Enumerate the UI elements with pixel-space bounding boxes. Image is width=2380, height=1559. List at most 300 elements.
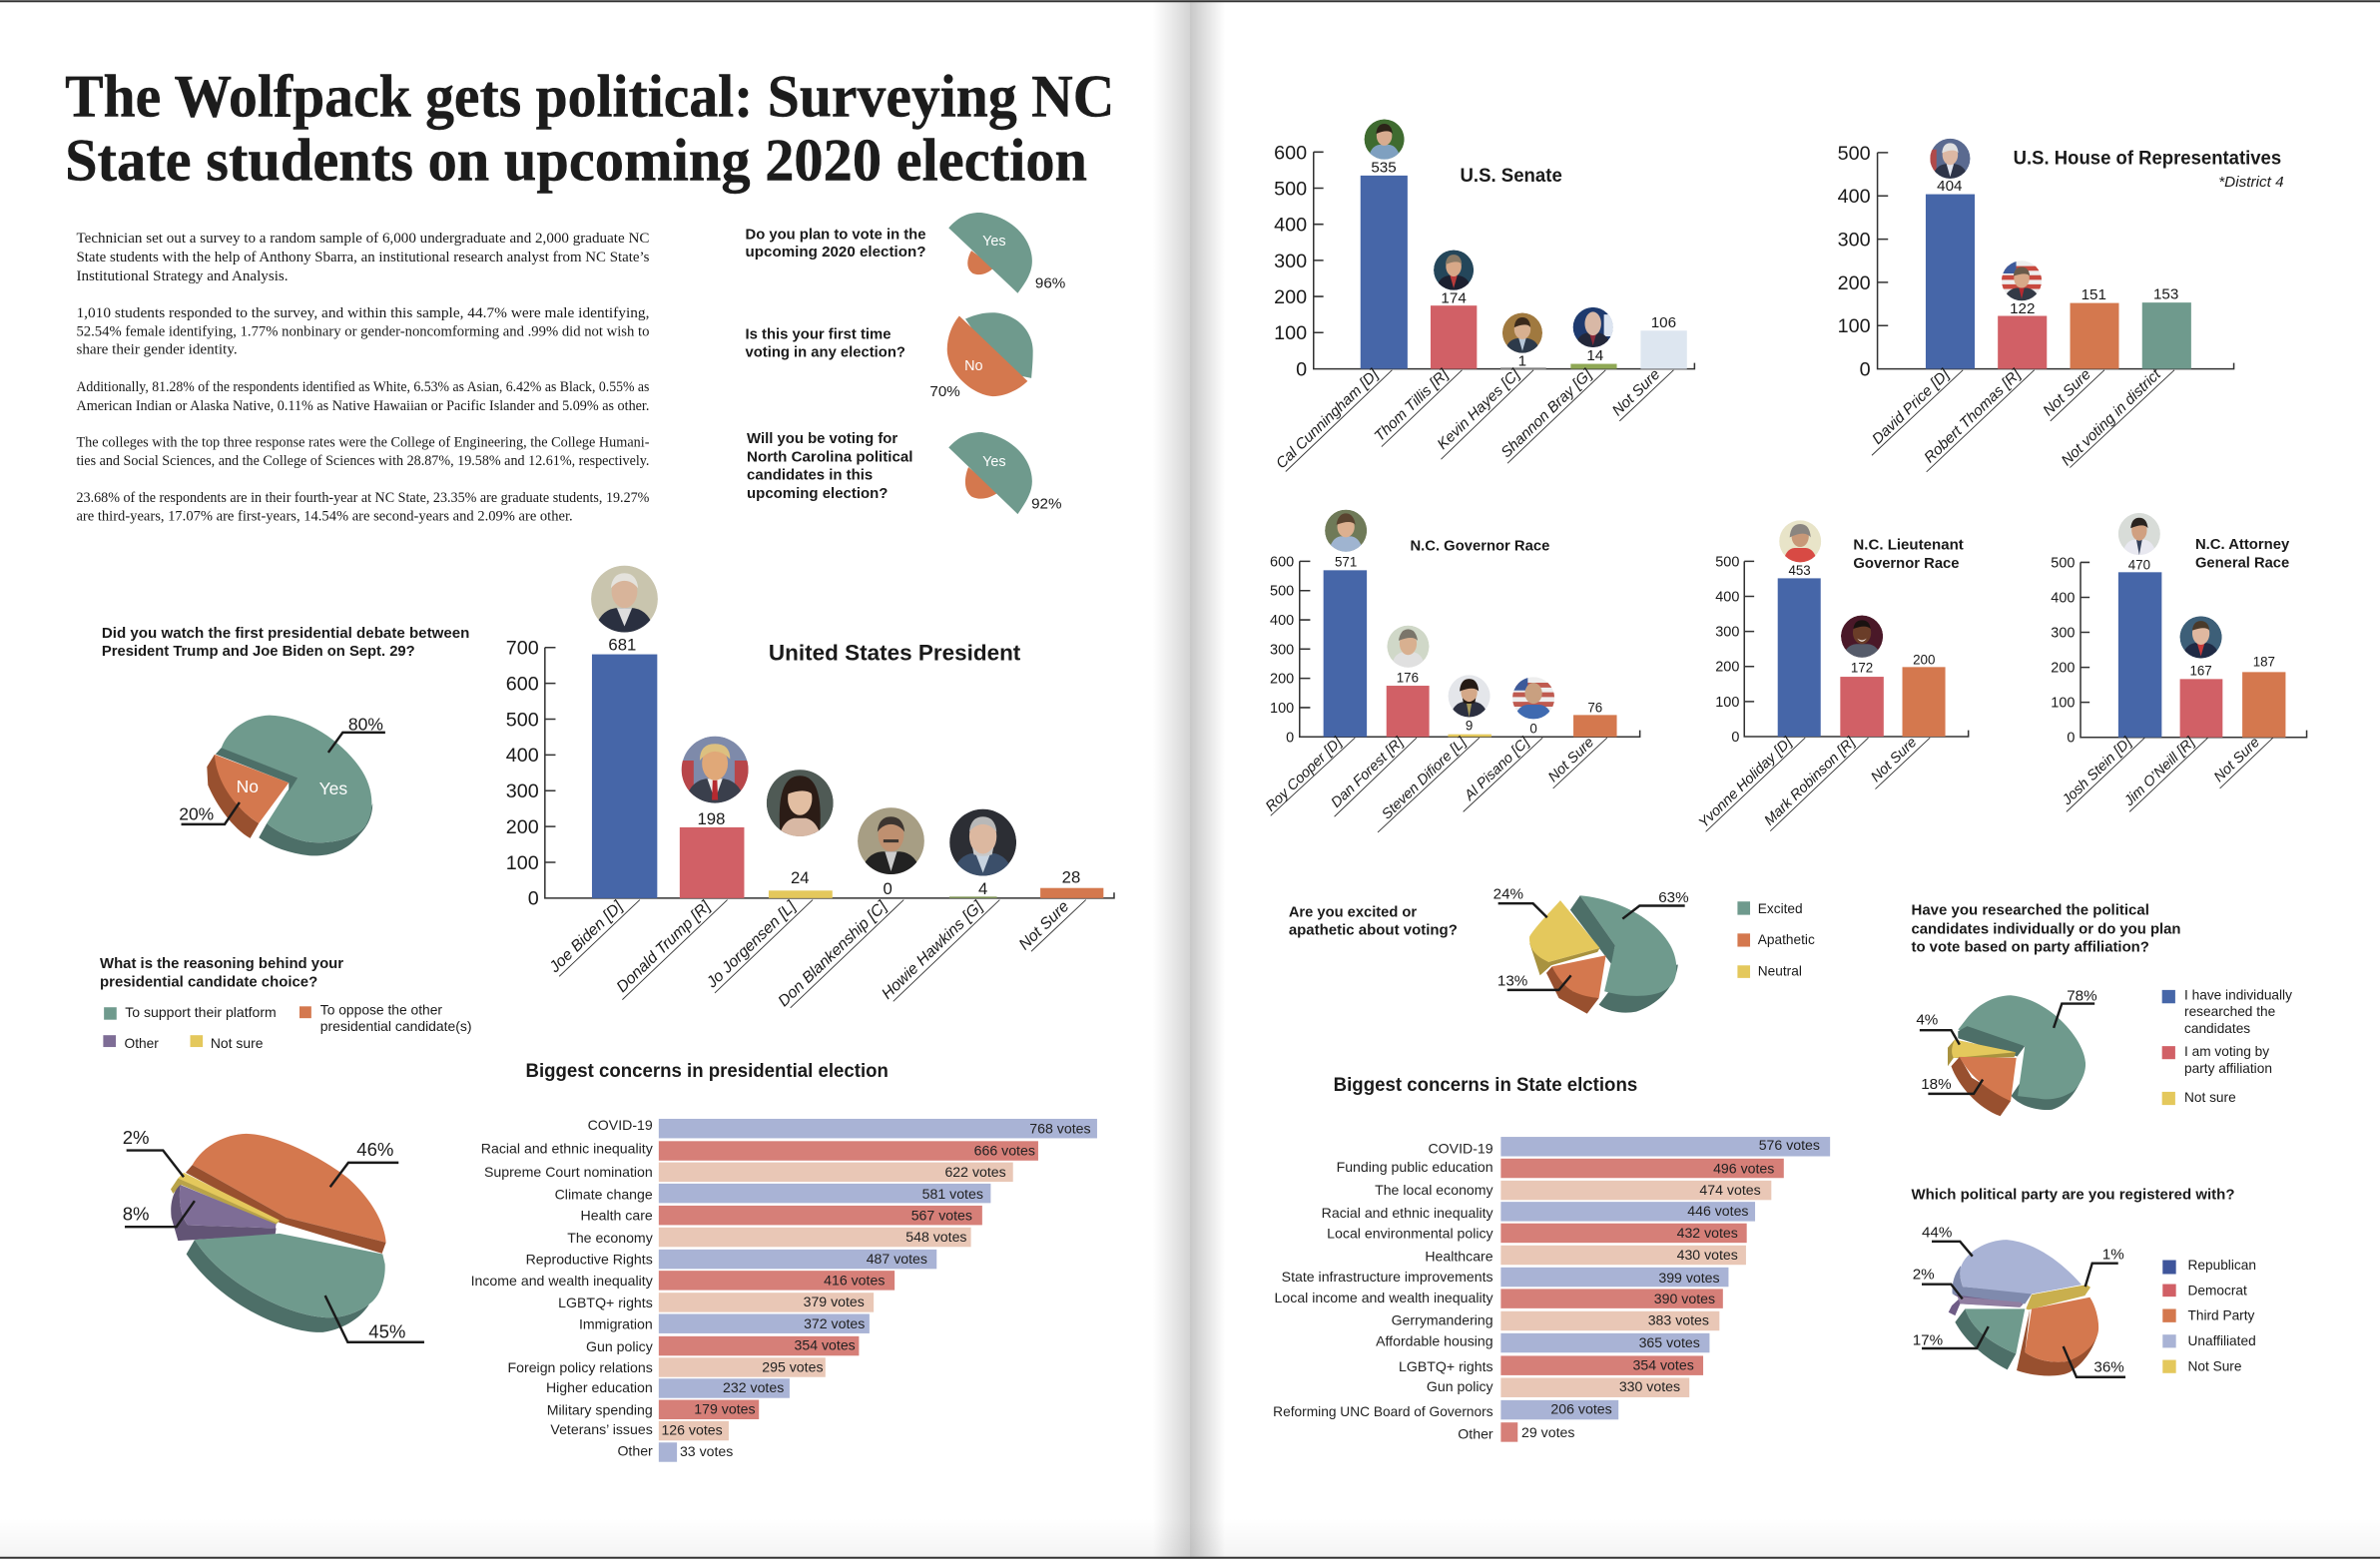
question: Have you researched the political (1911, 902, 2149, 919)
y axis: 500 (1270, 584, 1294, 600)
heading: Biggest concerns in State elctions (1334, 1075, 1637, 1096)
value labels: 198 (698, 809, 725, 828)
panel: party registration (1911, 1187, 2256, 1377)
legend: Other (125, 1036, 159, 1051)
vote values: 383 votes (1648, 1311, 1709, 1327)
y axis: 400 (2051, 591, 2075, 607)
vote values: 232 votes (723, 1379, 784, 1395)
y axis: 100 (1715, 695, 1739, 711)
y axis (2051, 555, 2307, 747)
intro text block: share their gender identity. (76, 342, 238, 358)
3D pie: candidate reasoning: 2% (123, 1127, 149, 1148)
intro text block: The colleges with the top three response rates were the College of Engineering, the College Humani- (76, 434, 650, 450)
legend: I am voting by (2184, 1044, 2269, 1059)
chart title: U.S. House of Representatives (2014, 148, 2281, 169)
pie: 96% (1035, 275, 1065, 292)
vote values: 496 votes (1713, 1161, 1774, 1177)
category labels: Affordable housing (1376, 1332, 1493, 1348)
category labels: Not Sure (1545, 735, 1597, 785)
category labels: COVID-19 (588, 1117, 653, 1133)
pie: No (964, 358, 983, 374)
y axis (1274, 142, 1694, 380)
panel: researched candidates (1911, 902, 2292, 1116)
photo: Thom Tillis (1434, 251, 1474, 291)
chart title: N.C. Governor Race (1410, 538, 1549, 555)
value labels (1335, 554, 1602, 736)
vote values: 430 votes (1677, 1247, 1738, 1263)
category labels: The economy (567, 1230, 654, 1246)
3D pie: Yes (319, 779, 347, 798)
category labels (1273, 1140, 1494, 1441)
category labels (546, 897, 1086, 1010)
category labels: Thom Tillis [R] (1371, 365, 1453, 445)
y axis: 0 (1286, 730, 1294, 746)
category labels: Reforming UNC Board of Governors (1273, 1403, 1493, 1419)
category labels (1273, 365, 1673, 472)
y axis: 400 (1715, 590, 1739, 606)
category labels: Not Sure (1016, 898, 1073, 953)
y axis: 500 (1274, 178, 1307, 200)
panel: U.S. House chart (1838, 139, 2284, 472)
category labels (1696, 734, 1930, 831)
3D pie (1493, 885, 1689, 1014)
category labels (2059, 734, 2273, 811)
category labels: Josh Stein [D] (2059, 734, 2135, 809)
legend: Not sure (211, 1036, 263, 1051)
value labels: 681 (608, 636, 636, 655)
panel: debate question (102, 625, 469, 855)
vote values: 330 votes (1619, 1378, 1680, 1394)
pie: 70% (929, 383, 960, 400)
vote values: 666 votes (974, 1142, 1035, 1158)
question: Will you be voting for (747, 430, 897, 447)
3D pie: 44% (1922, 1225, 1952, 1242)
category labels: Foreign policy relations (508, 1359, 653, 1375)
y axis: 500 (1838, 143, 1871, 165)
y axis: 600 (1274, 142, 1307, 164)
value labels: 0 (883, 879, 892, 898)
legend (1737, 901, 1815, 978)
value labels (2128, 557, 2275, 679)
category labels: Local income and wealth inequality (1275, 1290, 1494, 1305)
category labels: Military spending (547, 1401, 653, 1417)
intro text block: American Indian or Alaska Native, 0.11% as Native Hawaiian or Pacific Islander and 5.09% as other. (76, 398, 649, 414)
legend: Third Party (2188, 1308, 2255, 1323)
category labels: Robert Thomas [R] (1921, 365, 2025, 466)
vote values: 416 votes (824, 1272, 885, 1288)
y axis: 100 (506, 852, 539, 874)
category labels: Not voting in district (2059, 365, 2164, 469)
3D pie: candidate reasoning: 45% (368, 1321, 405, 1342)
category labels: Climate change (555, 1187, 653, 1203)
value labels (608, 636, 1080, 898)
legend: party affiliation (2184, 1061, 2272, 1076)
3D pie: 4% (1916, 1012, 1938, 1029)
category labels: Healthcare (1425, 1249, 1493, 1265)
value labels: 106 (1651, 314, 1676, 331)
pie (948, 213, 1065, 293)
intro text block: State students with the help of Anthony Sbarra, an institutional research analyst from NC State’s (76, 250, 650, 265)
question: upcoming election? (747, 485, 888, 502)
chart title: U.S. Senate (1460, 166, 1562, 187)
photo: Yvonne Holiday (1779, 520, 1821, 564)
category labels: Other (617, 1442, 653, 1458)
intro text block: ties and Social Sciences, and the College of Sciences with 28.87%, 19.58% and 12.61%, respectively. (76, 453, 649, 469)
y axis: 500 (1715, 554, 1739, 570)
vote values: 354 votes (1633, 1356, 1694, 1372)
value labels: 76 (1587, 700, 1602, 715)
legend: Excited (1758, 901, 1803, 916)
value labels: 187 (2253, 654, 2275, 669)
category labels: Don Blankenship [C] (776, 897, 891, 1010)
panel: United States President chart (506, 566, 1114, 1010)
y axis: 200 (1274, 286, 1307, 308)
vote values (1521, 1137, 1820, 1440)
y axis (1838, 143, 2234, 381)
vote values: 576 votes (1759, 1137, 1820, 1153)
3D pie: 36% (2093, 1359, 2124, 1376)
category labels: Cal Cunningham [D] (1273, 365, 1383, 472)
y axis: 100 (2051, 696, 2075, 712)
vote values: 548 votes (905, 1229, 966, 1245)
category labels: Not Sure (1868, 735, 1920, 785)
value labels: 153 (2153, 285, 2178, 302)
question: candidates in this (747, 467, 873, 484)
legend (2162, 988, 2292, 1105)
y axis: 300 (1715, 625, 1739, 641)
value labels: 151 (2082, 286, 2106, 303)
bars (1361, 176, 1687, 369)
photo: Kevin Hayes (1502, 312, 1542, 354)
y axis: 200 (1838, 272, 1871, 294)
photo: Josh Stein (2118, 513, 2160, 557)
vote values: 581 votes (922, 1186, 983, 1202)
title (65, 62, 1114, 194)
y axis: 300 (1838, 230, 1871, 252)
photo: Dan Forest (1387, 626, 1430, 670)
photo: Jim O'Neill (2180, 616, 2222, 660)
question: Which political party are you registered with? (1911, 1187, 2234, 1204)
legend: To oppose the other (320, 1003, 442, 1018)
vote values: 446 votes (1687, 1203, 1749, 1219)
category labels: Supreme Court nomination (484, 1164, 653, 1180)
question: Is this your first time (746, 325, 891, 342)
value labels: 172 (1851, 660, 1873, 675)
y axis: 0 (1296, 358, 1307, 380)
heading: Biggest concerns in presidential election (526, 1061, 889, 1082)
value labels: 571 (1335, 554, 1357, 569)
vote values: 33 votes (680, 1443, 733, 1459)
category labels: Mark Robinson [R] (1762, 734, 1859, 828)
value labels: 535 (1371, 160, 1397, 177)
y axis: 100 (1838, 315, 1871, 337)
category labels: State infrastructure improvements (1282, 1269, 1493, 1285)
pie: 92% (1031, 496, 1062, 513)
category labels: Howie Hawkins [G] (879, 897, 986, 1003)
vote values: 206 votes (1550, 1400, 1612, 1416)
y axis (506, 638, 1114, 910)
legend: candidates (2184, 1021, 2250, 1036)
photo: Steven Difiore (1449, 675, 1490, 719)
intro text block: Institutional Strategy and Analysis. (76, 268, 289, 284)
question: candidates individually or do you plan (1911, 920, 2181, 937)
intro text block: 52.54% female identifying, 1.77% nonbinary or gender-noncomforming and .99% did not wish to (76, 323, 649, 339)
panel: N.C. Attorney General chart (2051, 513, 2307, 811)
y axis: 200 (2051, 661, 2075, 677)
legend (103, 1003, 472, 1051)
chart title: General Race (2195, 554, 2289, 571)
panel: biggest concerns state (1273, 1075, 1830, 1442)
chart title (1853, 537, 1964, 572)
panel: biggest concerns presidential (471, 1061, 1097, 1462)
3D pie: 78% (2067, 988, 2097, 1005)
category labels: COVID-19 (1428, 1140, 1493, 1156)
photo: Cal Cunningham (1365, 119, 1405, 161)
y axis: 100 (1270, 701, 1294, 717)
vote values: 768 votes (1029, 1121, 1091, 1137)
photo: Don Blankenship (858, 807, 924, 877)
category labels: Racial and ethnic inequality (481, 1141, 654, 1157)
3D pie: No (237, 777, 259, 796)
chart title: N.C. Attorney (2195, 536, 2290, 553)
pie (948, 432, 1062, 514)
question: Do you plan to vote in the (746, 226, 925, 243)
3D pie: 80% (348, 715, 383, 735)
y axis: 0 (528, 888, 539, 910)
value labels: 176 (1397, 670, 1419, 685)
pie: Yes (982, 234, 1006, 250)
legend: presidential candidate(s) (320, 1019, 472, 1034)
value labels: 122 (2010, 300, 2035, 317)
3D pie (179, 715, 385, 855)
question: presidential candidate choice? (100, 974, 317, 991)
value labels: 28 (1062, 867, 1080, 886)
y axis (1715, 554, 1969, 746)
category labels: Steven Difiore [L] (1379, 734, 1471, 822)
photo: Jo Jorgensen (767, 770, 834, 839)
category labels (471, 1117, 654, 1458)
chart title: Governor Race (1853, 555, 1960, 572)
y axis: 500 (506, 709, 539, 731)
panel: first time voting (746, 312, 1033, 400)
3D pie: 17% (1913, 1331, 1943, 1348)
y axis: 300 (506, 780, 539, 802)
vote values (661, 1121, 1091, 1459)
category labels: Gun policy (1427, 1378, 1494, 1394)
3D pie: 24% (1493, 885, 1523, 902)
category labels: Gerrymandering (1392, 1311, 1493, 1327)
category labels: Not Sure (1609, 366, 1663, 419)
vote values: 567 votes (911, 1208, 972, 1224)
category labels: Higher education (546, 1379, 653, 1395)
question: Did you watch the first presidential debate between (102, 625, 469, 642)
chart title: N.C. Lieutenant (1853, 537, 1964, 554)
3D pie (1916, 988, 2097, 1116)
bars (2118, 572, 2285, 738)
title: The Wolfpack gets political: Surveying NC (65, 62, 1114, 129)
y axis: 300 (1270, 642, 1294, 658)
3D pie: candidate reasoning: 8% (123, 1204, 149, 1225)
question: President Trump and Joe Biden on Sept. 29? (102, 643, 415, 660)
question: to vote based on party affiliation? (1911, 938, 2149, 955)
y axis: 700 (506, 638, 539, 660)
y axis: 400 (1274, 215, 1307, 237)
category labels: Al Pisano [C] (1461, 734, 1533, 804)
vote values: 354 votes (794, 1337, 856, 1353)
title: State students on upcoming 2020 election (65, 127, 1087, 194)
3D pie: 18% (1921, 1076, 1952, 1093)
bars (659, 1119, 1097, 1462)
question: upcoming 2020 election? (746, 244, 925, 260)
3D pie: 13% (1497, 973, 1527, 990)
category labels: David Price [D] (1869, 365, 1954, 448)
category labels: Racial and ethnic inequality (1322, 1205, 1494, 1221)
photo: Al Pisano (1512, 677, 1554, 721)
value labels: 0 (1529, 721, 1537, 736)
3D pie: candidate reasoning (123, 1127, 424, 1342)
y axis: 600 (1270, 554, 1294, 570)
category labels: Jim O’Neill [R] (2120, 734, 2199, 810)
category labels: Roy Cooper [D] (1263, 734, 1346, 815)
intro text block: 23.68% of the respondents are in their fourth-year at NC State, 23.35% are graduate students, 19.27% (76, 490, 649, 506)
category labels (1869, 365, 2174, 472)
category labels: LGBTQ+ rights (558, 1295, 653, 1310)
question: voting in any election? (746, 344, 905, 361)
legend: Neutral (1758, 963, 1802, 978)
legend (2162, 1258, 2256, 1374)
legend: Not Sure (2188, 1359, 2241, 1374)
y axis: 400 (506, 745, 539, 767)
category labels: Local environmental policy (1327, 1225, 1494, 1241)
y axis: 300 (1274, 251, 1307, 272)
pie: Yes (982, 454, 1006, 470)
y axis: 400 (1270, 613, 1294, 629)
category labels: Shannon Bray [G] (1497, 365, 1596, 461)
y axis: 200 (1270, 672, 1294, 688)
y axis: 300 (2051, 626, 2075, 642)
category labels: Funding public education (1337, 1159, 1493, 1175)
question (747, 430, 913, 502)
intro text block: are third-years, 17.07% are first-years, 14.54% are second-years and 2.09% are other. (76, 508, 573, 524)
category labels: Reproductive Rights (526, 1252, 653, 1268)
legend: researched the (2184, 1004, 2275, 1019)
chart title (2195, 536, 2290, 571)
question: Are you excited or (1289, 903, 1417, 920)
bars (1324, 570, 1617, 737)
category labels: Gun policy (586, 1338, 654, 1354)
value labels: 9 (1466, 719, 1473, 734)
panel: reasoning legend (100, 955, 472, 1051)
district note: *District 4 (2218, 175, 2284, 191)
y axis (1270, 554, 1640, 746)
photo: Mark Robinson (1841, 616, 1883, 660)
intro text block: 1,010 students responded to the survey, and within this sample, 44.7% were male identifying, (76, 305, 649, 321)
category labels: Yvonne Holiday [D] (1696, 734, 1796, 831)
value labels: 14 (1586, 347, 1603, 364)
vote values: 29 votes (1521, 1424, 1574, 1440)
question (1911, 902, 2181, 955)
vote values: 126 votes (661, 1422, 723, 1438)
question (1289, 903, 1458, 939)
vote values: 365 votes (1639, 1334, 1700, 1350)
question (102, 625, 469, 660)
photo: Donald Trump (682, 737, 749, 806)
value labels: 174 (1441, 290, 1467, 307)
legend: Republican (2188, 1258, 2256, 1273)
category labels (1263, 734, 1607, 832)
panel: voting for NC candidates (747, 430, 1062, 514)
y axis: 0 (1860, 359, 1871, 381)
category labels: Other (1458, 1425, 1493, 1441)
category labels: Kevin Hayes [C] (1435, 365, 1524, 453)
bars (592, 655, 1103, 898)
value labels (1937, 178, 2178, 317)
legend: Unaffiliated (2188, 1333, 2256, 1348)
question (746, 325, 905, 361)
bars (1778, 578, 1946, 737)
y axis: 0 (2067, 731, 2075, 747)
vote values: 474 votes (1699, 1182, 1761, 1198)
question: apathetic about voting? (1289, 922, 1458, 939)
legend: I have individually (2184, 988, 2292, 1003)
panel: excited or apathetic (1289, 885, 1815, 1014)
3D pie: 2% (1913, 1266, 1935, 1283)
chart title: United States President (769, 641, 1021, 666)
category labels: Not Sure (2211, 735, 2263, 785)
category labels: Immigration (579, 1316, 653, 1332)
y axis: 500 (2051, 555, 2075, 571)
value labels (1371, 160, 1676, 370)
panel: N.C. Lieutenant Governor chart (1696, 520, 1969, 831)
category labels: Jo Jorgensen [L] (703, 897, 800, 992)
y axis: 200 (1715, 660, 1739, 676)
y axis: 100 (1274, 322, 1307, 344)
value labels: 453 (1788, 563, 1811, 578)
category labels: The local economy (1375, 1182, 1494, 1198)
intro text block: Additionally, 81.28% of the respondents identified as White, 6.53% as Asian, 6.42% as Black, 0.55% as (76, 379, 650, 395)
legend: To support their platform (125, 1005, 277, 1020)
category labels: Not Sure (2040, 366, 2094, 419)
photo: David Price (1930, 139, 1970, 181)
value labels: 470 (2128, 557, 2150, 572)
intro text block (76, 231, 650, 524)
photo: Howie Hawkins (949, 809, 1016, 879)
3D pie: 63% (1658, 889, 1689, 906)
category labels: LGBTQ+ rights (1399, 1358, 1493, 1374)
vote values: 390 votes (1654, 1291, 1715, 1306)
category labels: Donald Trump [R] (614, 897, 715, 996)
legend: Apathetic (1758, 932, 1815, 947)
value labels (1788, 563, 1935, 675)
bars (1926, 195, 2191, 369)
question (746, 226, 925, 260)
vote values: 487 votes (867, 1251, 927, 1267)
value labels: 167 (2189, 664, 2212, 679)
panel: N.C. Governor chart (1263, 510, 1640, 832)
photo: Shannon Bray (1573, 307, 1613, 349)
category labels: Health care (581, 1208, 653, 1224)
category labels: Dan Forest [R] (1329, 734, 1408, 811)
question (100, 955, 343, 991)
3D pie: 20% (179, 804, 214, 824)
y axis: 600 (506, 673, 539, 695)
question: North Carolina political (747, 448, 913, 465)
y axis: 0 (1731, 730, 1739, 746)
value labels: 24 (791, 868, 810, 887)
vote values: 295 votes (762, 1358, 824, 1374)
3D pie: 1% (2102, 1246, 2124, 1263)
intro text block: Technician set out a survey to a random sample of 6,000 undergraduate and 2,000 graduate NC (76, 231, 649, 247)
